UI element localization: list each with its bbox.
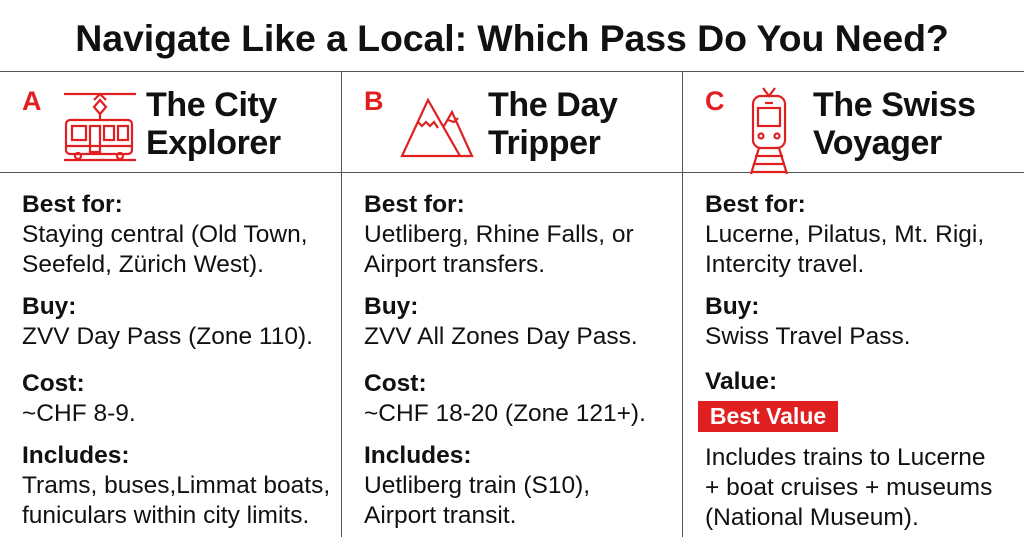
letter A: A xyxy=(22,86,42,116)
panel: city explorer xyxy=(22,86,281,162)
text: city explorer details: Buy: xyxy=(22,293,76,320)
text: day tripper details: Includes: xyxy=(364,442,472,469)
text: city explorer details: Seefeld, Zürich West). xyxy=(22,251,264,278)
badge: best value xyxy=(698,401,838,432)
text: day tripper details: Airport transit. xyxy=(364,502,516,529)
panel: swiss voyager xyxy=(705,86,976,174)
text: swiss voyager includes: Includes trains to Lucerne xyxy=(705,444,986,471)
text: day tripper details: Uetliberg, Rhine Falls, or xyxy=(364,221,634,248)
text: day tripper details: Airport transfers. xyxy=(364,251,545,278)
text: day tripper details: ~CHF 18-20 (Zone 121+). xyxy=(364,400,646,427)
heading: The City xyxy=(146,86,277,124)
text: city explorer details: funiculars within city limits. xyxy=(22,502,309,529)
heading: The Swiss xyxy=(813,86,976,124)
heading: Explorer xyxy=(146,124,281,162)
panel: day tripper xyxy=(364,86,618,162)
text: city explorer details: Staying central (Old Town, xyxy=(22,221,308,248)
text: city explorer details: ~CHF 8-9. xyxy=(22,400,136,427)
text: day tripper details: Best for: xyxy=(364,191,465,218)
letter B: B xyxy=(364,86,384,116)
text: city explorer details xyxy=(22,191,330,529)
text: city explorer details: Trams, buses,Limmat boats, xyxy=(22,472,330,499)
text: city explorer details: ZVV Day Pass (Zone 110). xyxy=(22,323,313,350)
heading xyxy=(146,86,281,162)
text: swiss voyager details: Swiss Travel Pass. xyxy=(705,323,911,350)
text: swiss voyager includes: + boat cruises + museums xyxy=(705,474,992,501)
text: day tripper details: Cost: xyxy=(364,370,427,397)
text: day tripper details: Uetliberg train (S10), xyxy=(364,472,590,499)
badge: best value: Best Value xyxy=(710,403,826,429)
text: swiss voyager includes xyxy=(705,444,992,531)
heading xyxy=(488,86,618,162)
text: city explorer details: Best for: xyxy=(22,191,123,218)
letter C: C xyxy=(705,86,724,116)
text: swiss voyager details: Best for: xyxy=(705,191,806,218)
text: day tripper details: ZVV All Zones Day Pass. xyxy=(364,323,638,350)
text: swiss voyager details: Value: xyxy=(705,368,777,395)
text: city explorer details: Includes: xyxy=(22,442,130,469)
icon: mountain xyxy=(400,98,474,158)
heading xyxy=(813,86,976,162)
icon: tram xyxy=(64,92,136,162)
text: swiss voyager details: Lucerne, Pilatus, Mt. Rigi, xyxy=(705,221,984,248)
heading: Voyager xyxy=(813,124,942,162)
heading: Tripper xyxy=(488,124,600,162)
text: swiss voyager details xyxy=(705,191,984,395)
icon: train xyxy=(750,87,788,174)
text: day tripper details xyxy=(364,191,646,529)
heading: The Day xyxy=(488,86,617,124)
text: swiss voyager includes: (National Museum). xyxy=(705,504,919,531)
text: day tripper details: Buy: xyxy=(364,293,418,320)
text: swiss voyager details: Buy: xyxy=(705,293,759,320)
text: swiss voyager details: Intercity travel. xyxy=(705,251,864,278)
text: city explorer details: Cost: xyxy=(22,370,85,397)
title: Navigate Like a Local: Which Pass Do You Need? xyxy=(75,17,949,59)
